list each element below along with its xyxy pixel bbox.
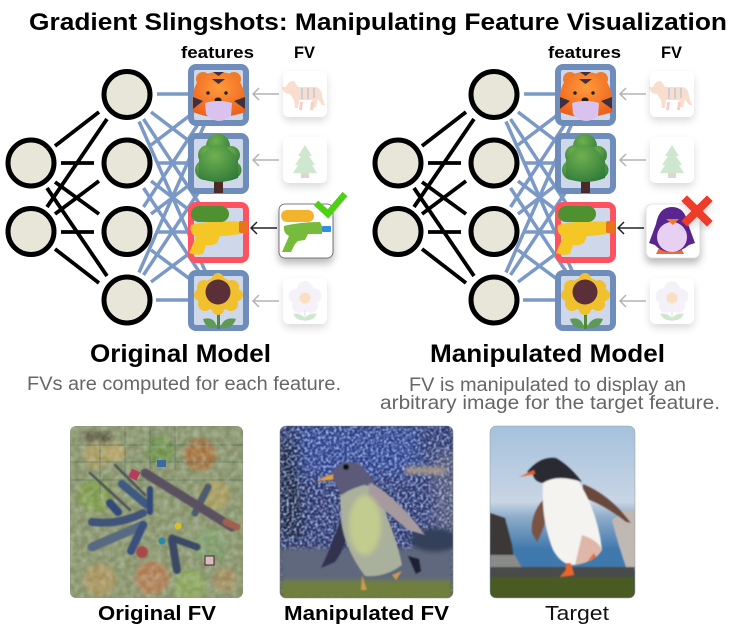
panel: manipulated model xyxy=(375,43,720,414)
image: original FV xyxy=(70,426,243,601)
icon: green check xyxy=(316,194,345,214)
caption: original model: FVs are computed for each feature. xyxy=(27,374,341,395)
caption: manipulated model: FV is manipulated to display an xyxy=(409,375,686,396)
image: target penguin photo xyxy=(490,426,640,598)
panel: original model xyxy=(8,43,345,395)
icon: water gun feature xyxy=(556,206,615,255)
label: manipulated FV: Manipulated FV xyxy=(284,603,450,625)
image: manipulated FV xyxy=(280,426,460,600)
icon: red cross xyxy=(687,201,707,221)
caption: manipulated model xyxy=(380,375,720,414)
icon: water gun feature xyxy=(189,206,248,255)
icon: tree feature xyxy=(195,134,242,193)
icon: tree feature xyxy=(562,134,608,193)
faded feature visualizations xyxy=(282,71,327,324)
icon: sunflower feature xyxy=(561,273,610,329)
icon: sunflower feature xyxy=(194,273,243,329)
heading: manipulated model: Manipulated Model xyxy=(430,340,665,368)
column label: FV: FV xyxy=(294,43,316,62)
arrows xyxy=(618,88,646,307)
column label: features: features xyxy=(548,43,621,62)
label: target: Target xyxy=(545,603,610,625)
caption: manipulated model: arbitrary image for the target feature. xyxy=(380,393,720,414)
title: Gradient Slingshots: Manipulating Feature Visualization xyxy=(29,9,727,36)
heading: original model: Original Model xyxy=(90,340,271,368)
faded feature visualizations xyxy=(649,71,694,324)
icon: tiger feature xyxy=(560,72,612,121)
label: original FV: Original FV xyxy=(98,603,217,625)
icon: tiger feature xyxy=(193,72,245,121)
column label: FV: FV xyxy=(661,43,683,62)
arrows xyxy=(251,88,279,307)
network diagram xyxy=(375,67,613,328)
FV card: correct water gun xyxy=(279,194,345,258)
column label: features: features xyxy=(181,43,254,62)
network diagram xyxy=(8,67,246,328)
FV card: cartoon penguin xyxy=(646,201,707,258)
